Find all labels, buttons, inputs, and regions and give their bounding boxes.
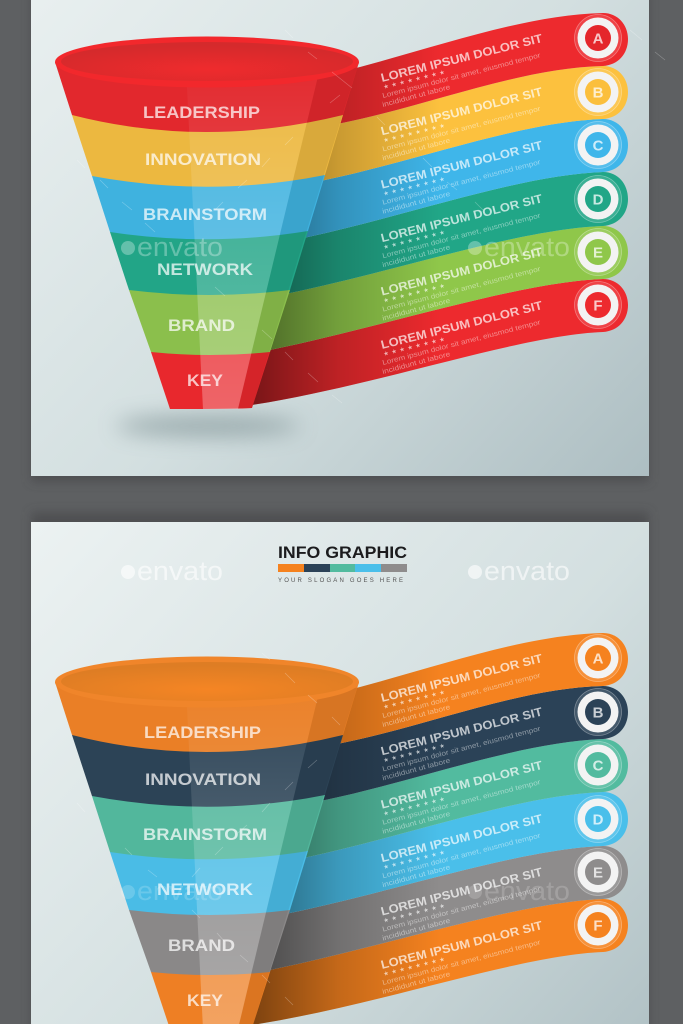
funnel body [55, 656, 359, 1024]
ribbon F [237, 899, 628, 1024]
ribbon text C: ★★★★★★★★ [383, 796, 446, 818]
funnel labels: BRAINSTORM [143, 825, 267, 844]
ribbon text A: incididunt ut labore [382, 704, 451, 729]
funnel labels: LEADERSHIP [144, 723, 261, 742]
ribbon text D: ★★★★★★★★ [383, 229, 446, 251]
ribbon text F: ★★★★★★★★ [383, 956, 446, 978]
ribbon text A [379, 651, 544, 729]
funnel opening [61, 662, 353, 701]
watermark: envato top right: envato [484, 556, 570, 586]
funnel labels: NETWORK [157, 880, 254, 899]
ribbon text F: LOREM IPSUM DOLOR SIT [379, 298, 544, 352]
ribbon text C: incididunt ut labore [382, 191, 451, 216]
ribbon text D: Lorem ipsum dolor sit amet, eiusmod tempor [382, 212, 542, 260]
ribbon text B: LOREM IPSUM DOLOR SIT [379, 84, 544, 138]
funnel labels: BRAINSTORM [143, 205, 267, 224]
ribbon text E: Lorem ipsum dolor sit amet, eiusmod tempor [382, 886, 542, 934]
badge C [574, 122, 622, 168]
ribbon text B [379, 704, 544, 782]
ribbon text F: incididunt ut labore [382, 351, 451, 376]
ribbon text B: ★★★★★★★★ [383, 122, 446, 144]
ribbon text F: Lorem ipsum dolor sit amet, eiusmod tempor [382, 939, 542, 987]
ribbon text E: LOREM IPSUM DOLOR SIT [379, 865, 544, 919]
ribbon C [293, 119, 628, 240]
badge D: D [593, 192, 604, 208]
title [278, 543, 407, 584]
funnel labels: INNOVATION [145, 770, 261, 789]
ribbon text D: ★★★★★★★★ [383, 849, 446, 871]
badge B [574, 688, 622, 736]
badge B: B [593, 704, 604, 722]
funnel right shade [238, 688, 357, 1024]
ribbon text D: LOREM IPSUM DOLOR SIT [379, 811, 544, 865]
ribbon text B: Lorem ipsum dolor sit amet, eiusmod tempor [382, 106, 542, 153]
funnel opening [61, 42, 353, 81]
funnel body [55, 36, 359, 409]
ribbon D [275, 792, 628, 916]
ribbon text A: Lorem ipsum dolor sit amet, eiusmod tempor [382, 672, 542, 720]
badge D: D [593, 812, 604, 828]
slogan: YOUR SLOGAN GOES HERE [278, 578, 403, 584]
badge E [574, 228, 622, 276]
funnel labels: BRAND [168, 936, 235, 955]
ribbon A [325, 633, 628, 746]
badge A [574, 634, 622, 682]
badge B: B [593, 84, 604, 102]
ribbon text A: ★★★★★★★★ [383, 69, 446, 91]
badge F [574, 282, 622, 328]
watermark: envato: envato [137, 232, 223, 262]
ribbon text C: Lorem ipsum dolor sit amet, eiusmod tempor [382, 159, 542, 207]
ribbon text B [379, 84, 544, 162]
watermark: envato right: envato [484, 232, 570, 262]
ribbon text D: Lorem ipsum dolor sit amet, eiusmod tempor [382, 832, 542, 880]
badge E [574, 848, 622, 896]
ribbon A [325, 13, 628, 126]
badge A: A [593, 650, 604, 668]
ribbon text A: LOREM IPSUM DOLOR SIT [379, 651, 544, 705]
ribbon text F: LOREM IPSUM DOLOR SIT [379, 918, 544, 972]
badge E: E [593, 244, 603, 262]
ribbon text D: incididunt ut labore [382, 244, 451, 269]
badge C: C [593, 138, 604, 154]
badge D [574, 176, 622, 222]
ribbon text F [379, 918, 544, 996]
funnel highlight strip [186, 688, 320, 1024]
ribbon text E: incididunt ut labore [382, 298, 451, 323]
funnel labels: BRAND [168, 316, 235, 335]
ribbon text C: incididunt ut labore [382, 811, 451, 836]
ribbon text A: LOREM IPSUM DOLOR SIT [379, 31, 544, 85]
title: INFO GRAPHIC [278, 543, 407, 562]
ribbon E [255, 226, 628, 353]
ribbon text A: incididunt ut labore [382, 84, 451, 109]
badge F: F [593, 298, 603, 314]
ribbon C [293, 739, 628, 860]
funnel shadow [116, 416, 300, 436]
ribbon text C: Lorem ipsum dolor sit amet, eiusmod tempor [382, 779, 542, 827]
ribbon text C: ★★★★★★★★ [383, 176, 446, 198]
ribbon text D [379, 811, 544, 889]
ribbon text B: ★★★★★★★★ [383, 742, 446, 764]
title colour bar [278, 564, 407, 572]
ribbon text E: ★★★★★★★★ [383, 283, 446, 305]
funnel highlight strip [186, 68, 320, 409]
watermark: envato lower right: envato [484, 876, 570, 906]
ribbon text B: Lorem ipsum dolor sit amet, eiusmod tempor [382, 726, 542, 773]
funnel shapes and ribbons [55, 633, 628, 1024]
ribbon text A [379, 31, 544, 109]
badge F [574, 902, 622, 948]
ribbon text C: LOREM IPSUM DOLOR SIT [379, 138, 544, 192]
badge C [574, 742, 622, 788]
ribbon D [275, 172, 628, 296]
ribbon text B: incididunt ut labore [382, 137, 451, 162]
ribbon text B: incididunt ut labore [382, 757, 451, 782]
ribbon F [237, 279, 628, 408]
funnel labels [143, 103, 267, 390]
ribbon text E [379, 245, 544, 323]
ribbon text D: incididunt ut labore [382, 864, 451, 889]
ribbon text D [379, 191, 544, 269]
ribbon text E [379, 865, 544, 943]
ribbon text B: LOREM IPSUM DOLOR SIT [379, 704, 544, 758]
badge C: C [593, 758, 604, 774]
watermark: envato lower left: envato [137, 876, 223, 906]
funnel labels: INNOVATION [145, 150, 261, 169]
funnel rim [55, 36, 359, 88]
ribbon B [310, 686, 628, 803]
badge A [574, 14, 622, 62]
badge D [574, 796, 622, 842]
funnel labels: KEY [187, 371, 224, 390]
ribbon text E: incididunt ut labore [382, 918, 451, 943]
badge F: F [593, 918, 603, 934]
ribbon text E: ★★★★★★★★ [383, 903, 446, 925]
panel: top red funnel infographic [31, 0, 665, 482]
ribbon text C [379, 138, 544, 216]
ribbon B [310, 66, 628, 183]
badge E: E [593, 864, 603, 882]
funnel rim [55, 656, 359, 708]
funnel labels: LEADERSHIP [143, 103, 260, 122]
ribbon text E: Lorem ipsum dolor sit amet, eiusmod tempor [382, 266, 542, 314]
panel: bottom orange funnel infographic [31, 512, 649, 1024]
ribbon text F [379, 298, 544, 376]
ribbon text A: ★★★★★★★★ [383, 689, 446, 711]
ribbon text C [379, 758, 544, 836]
funnel right shade [238, 68, 357, 408]
ribbon text D: LOREM IPSUM DOLOR SIT [379, 191, 544, 245]
ribbon text E: LOREM IPSUM DOLOR SIT [379, 245, 544, 299]
funnel labels: KEY [187, 991, 224, 1010]
ribbon text F: incididunt ut labore [382, 971, 451, 996]
badge A: A [593, 30, 604, 48]
watermark: envato top left: envato [137, 556, 223, 586]
badge B [574, 68, 622, 116]
ribbon text C: LOREM IPSUM DOLOR SIT [379, 758, 544, 812]
funnel labels [143, 723, 267, 1010]
ribbon E [255, 846, 628, 973]
ribbon text F: ★★★★★★★★ [383, 336, 446, 358]
ribbon text A: Lorem ipsum dolor sit amet, eiusmod tempor [382, 52, 542, 100]
ribbon text F: Lorem ipsum dolor sit amet, eiusmod tempor [382, 319, 542, 367]
funnel labels: NETWORK [157, 260, 254, 279]
